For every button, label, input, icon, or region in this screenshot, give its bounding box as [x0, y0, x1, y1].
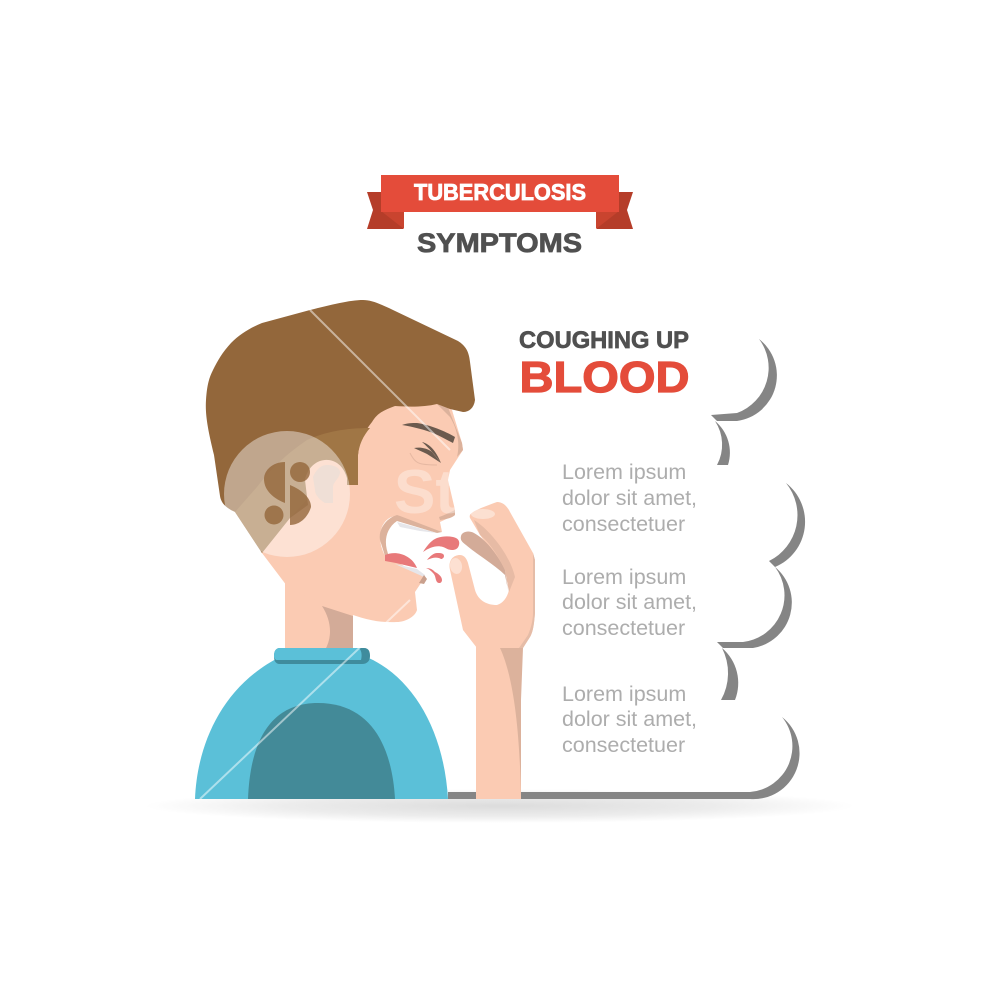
tongue — [385, 553, 417, 568]
upper lip — [380, 515, 442, 556]
subtitle: SYMPTOMS — [417, 228, 582, 258]
inner ear — [313, 465, 340, 503]
text block 3: dolor sit amet, — [562, 707, 697, 731]
blood drops — [423, 536, 459, 583]
watermark — [200, 310, 495, 799]
heading: blood: BLOOD — [520, 353, 690, 402]
thumbnail — [449, 557, 463, 575]
shirt inner shade — [248, 703, 395, 799]
text block 1 — [562, 460, 697, 536]
text block 1: Lorem ipsum — [562, 460, 686, 484]
text block 3: Lorem ipsum — [562, 682, 686, 706]
title banner — [367, 175, 633, 229]
banner title text: TUBERCULOSIS — [414, 179, 586, 205]
shirt — [195, 656, 448, 799]
text block 1: consectetuer — [562, 512, 685, 536]
closed eye — [414, 448, 441, 463]
eyebrow — [402, 423, 455, 443]
nostril — [439, 510, 455, 520]
forehead shade — [437, 404, 463, 457]
palm and thumb — [449, 502, 535, 648]
text block 2: consectetuer — [562, 616, 685, 640]
face — [245, 395, 463, 622]
heading: coughing up: COUGHING UP — [519, 327, 689, 354]
arm — [476, 645, 521, 799]
ear and cheek — [262, 460, 358, 570]
text block 2: Lorem ipsum — [562, 565, 686, 589]
lower hair highlight — [235, 428, 370, 553]
text block 1: dolor sit amet, — [562, 486, 697, 510]
teeth shade — [397, 522, 437, 533]
text block 3 — [562, 682, 697, 757]
middle finger shade — [474, 520, 515, 592]
hand and arm — [449, 502, 535, 799]
speech cloud outline shadow — [448, 339, 805, 799]
watermark: St — [394, 458, 456, 527]
head — [206, 300, 475, 622]
collar — [274, 648, 370, 664]
text block 2 — [562, 565, 697, 640]
text block 3: consectetuer — [562, 733, 685, 757]
hand edge shade — [519, 553, 535, 648]
hair — [206, 300, 475, 553]
text block 2: dolor sit amet, — [562, 590, 697, 614]
folded finger — [461, 532, 508, 590]
ground shadow — [145, 789, 855, 823]
neck — [285, 570, 353, 652]
